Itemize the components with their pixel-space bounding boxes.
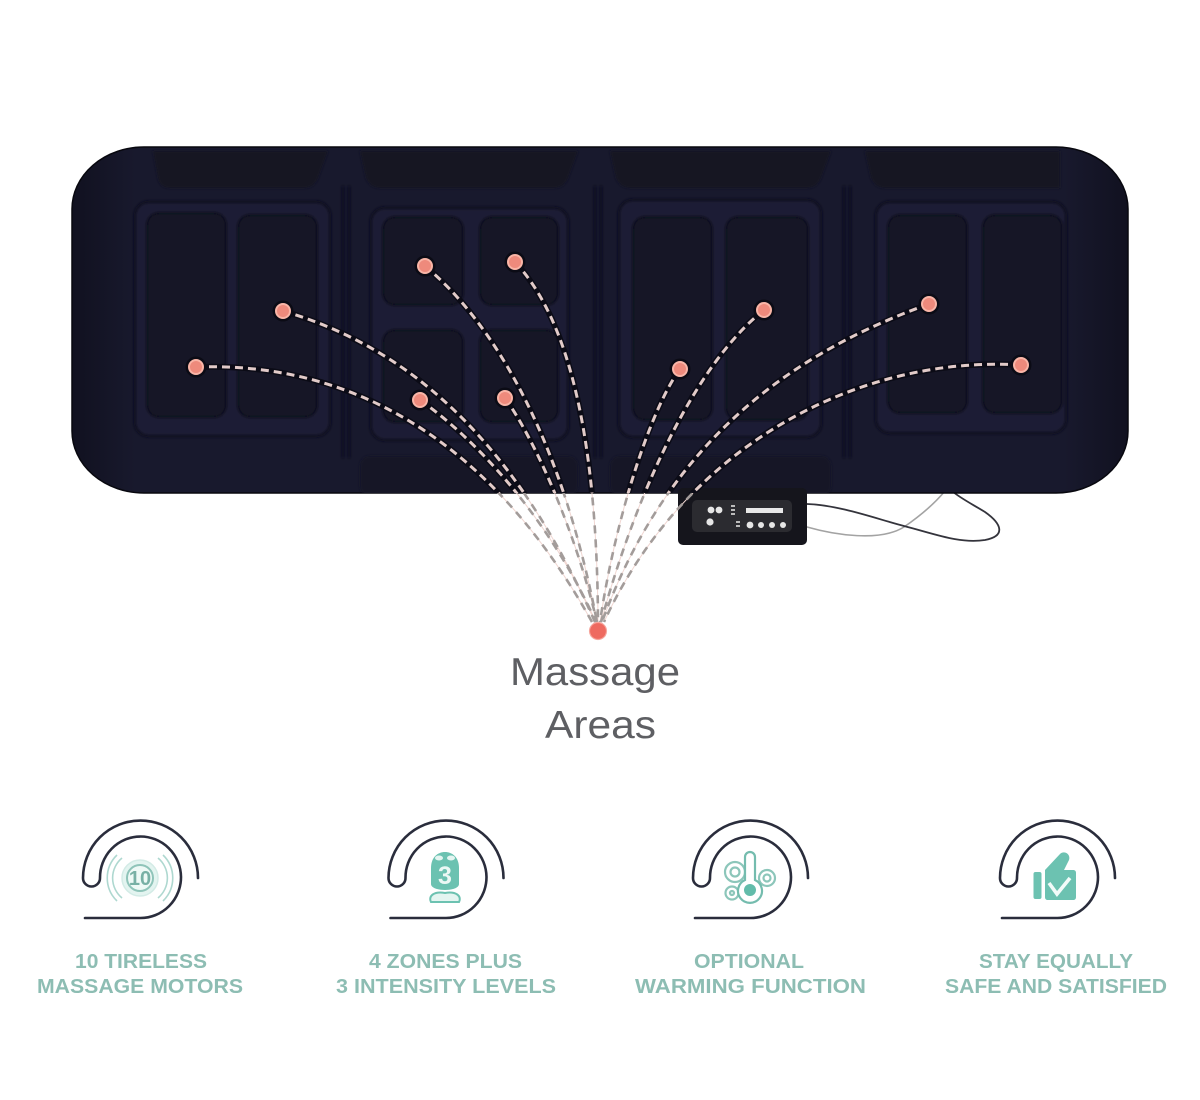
massage mat [72,147,1128,496]
caption: OPTIONAL [694,951,804,973]
caption: 10 TIRELESS [75,951,207,973]
hub marker [590,622,606,640]
icon: arc frame [83,821,198,918]
feature: safe and satisfied [945,821,1167,998]
caption [945,951,1167,998]
caption: MASSAGE MOTORS [37,976,243,998]
icon: body zones: 3 [438,862,452,890]
caption: WARMING FUNCTION [635,976,866,998]
caption: 3 INTENSITY LEVELS [336,976,556,998]
heading: massage areas: Massage [510,651,680,694]
icon: body zones [430,852,460,902]
heading: massage areas [510,651,680,747]
icon: thumbs up with check [1034,852,1076,900]
icon: arc frame [388,821,504,918]
controller unit [678,488,807,545]
massage point markers [186,252,1032,410]
feature: massage motors [37,821,243,998]
icon: arc frame [1000,821,1115,918]
caption: STAY EQUALLY [979,951,1134,973]
icon: vibrating motor [107,855,173,901]
icon: vibrating motor: 10 [129,868,151,890]
icon: thermometer and swirls [725,852,775,903]
caption [635,951,866,998]
mat padding and seams [135,151,1066,496]
feature: warming function [635,821,866,998]
caption: 4 ZONES PLUS [369,951,522,973]
feature: zones and intensity [336,821,556,998]
caption [336,951,556,998]
dashed connector lines [196,262,1021,622]
icon: arc frame [693,821,808,918]
heading: massage areas: Areas [545,704,656,747]
caption: SAFE AND SATISFIED [945,976,1167,998]
controller cables [807,491,999,541]
caption [37,951,243,998]
